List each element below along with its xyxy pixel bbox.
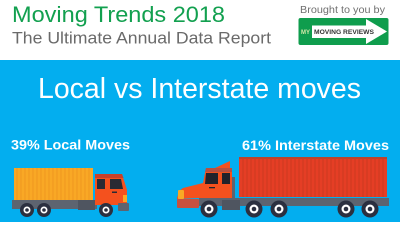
- icon: interstate truck: [177, 157, 389, 218]
- title: Moving Trends 2018: [12, 2, 225, 27]
- label: local moves: 39% Local Moves: [11, 136, 130, 152]
- logo: my moving reviews: MY: [301, 30, 310, 36]
- icon: local truck: [12, 168, 129, 217]
- heading: Local vs Interstate moves: [38, 73, 361, 105]
- subtitle: The Ultimate Annual Data Report: [12, 28, 271, 48]
- logo: my moving reviews: [298, 18, 388, 45]
- label: interstate moves: 61% Interstate Moves: [242, 137, 389, 153]
- logo: my moving reviews: MOVING REVIEWS: [314, 29, 375, 36]
- brought to you by: Brought to you by: [300, 5, 385, 16]
- blue panel: [0, 60, 400, 222]
